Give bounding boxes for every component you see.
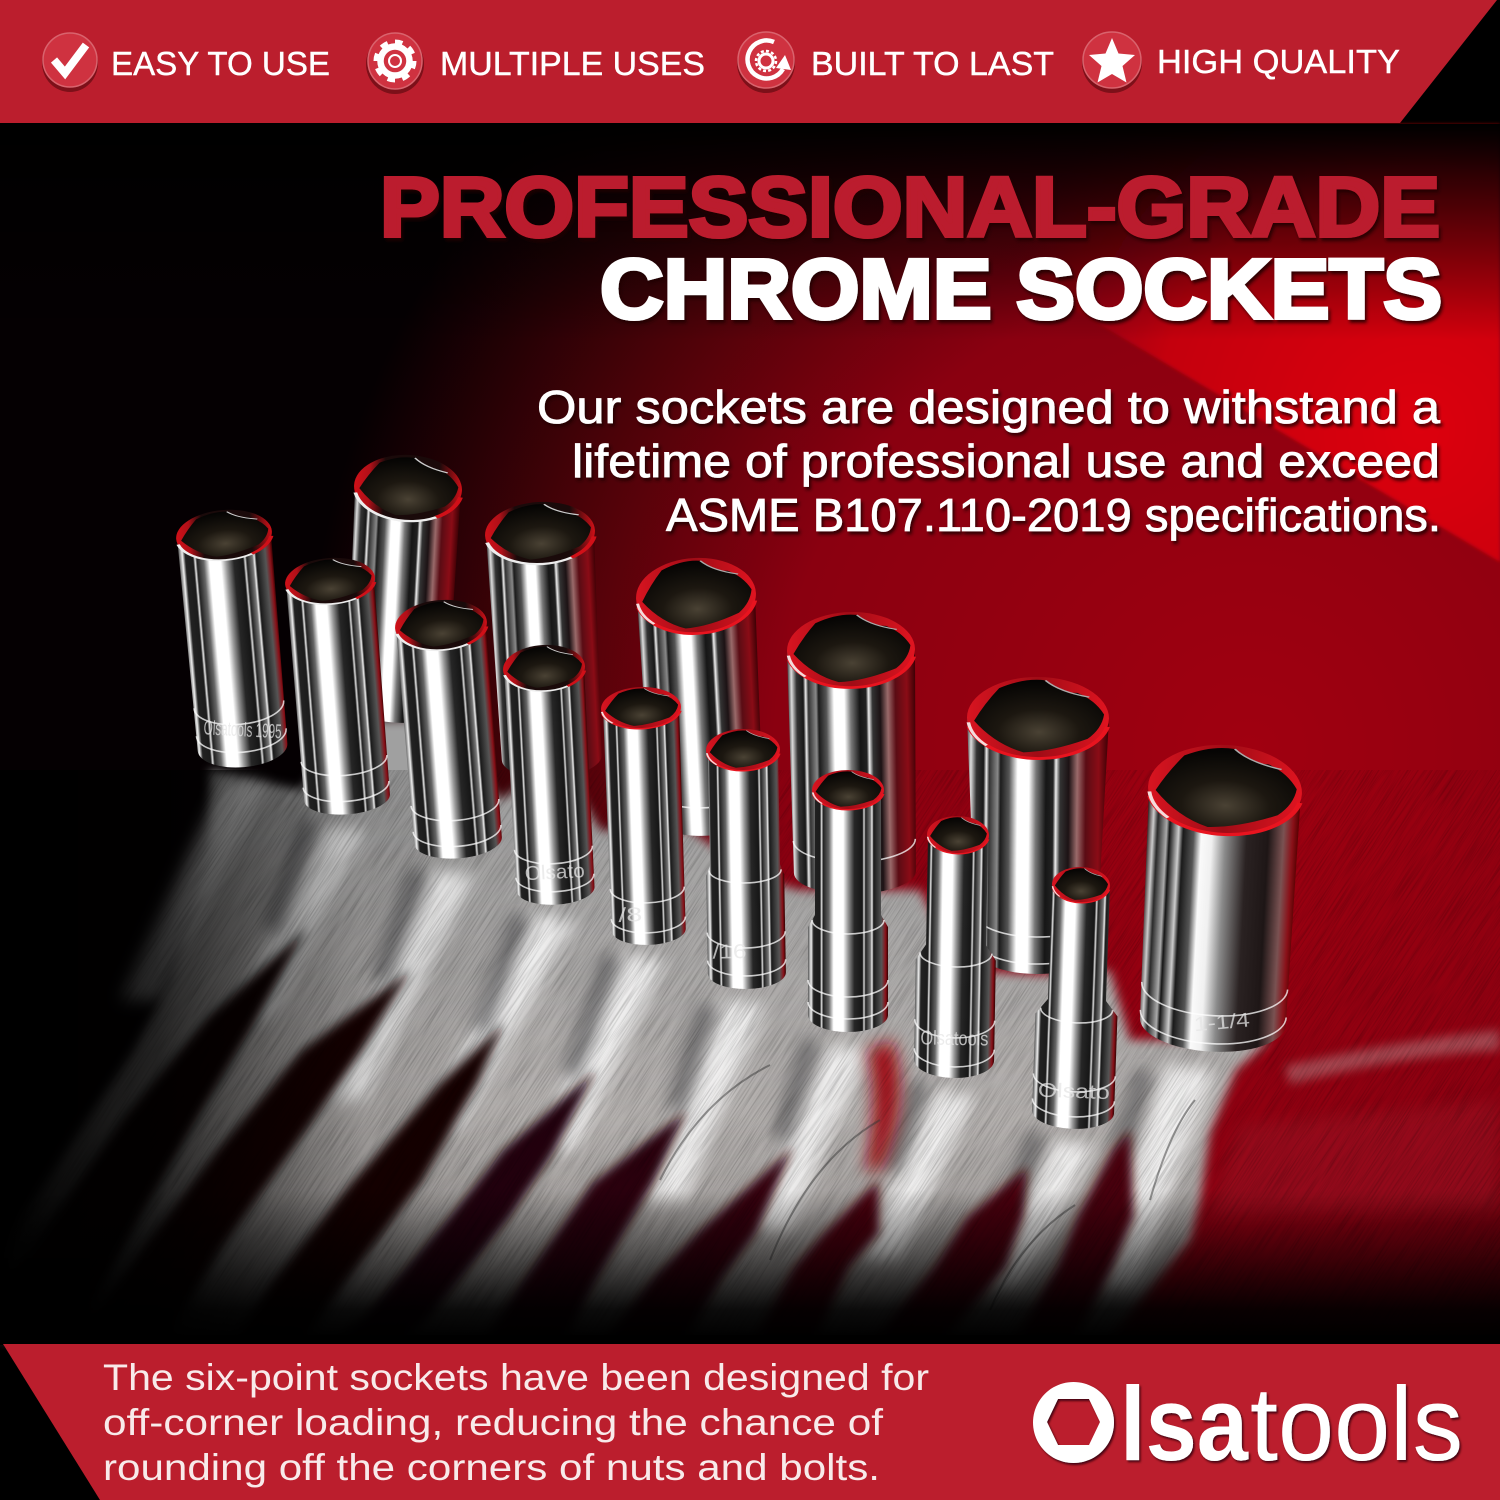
title: PROFESSIONAL-GRADE [380, 160, 1440, 254]
label: multiple uses: MULTIPLE USES [440, 45, 705, 82]
socket: back row third [634, 555, 768, 839]
socket: front row third [393, 596, 505, 862]
bottom text block: rounding off the corners of nuts and bolts. [103, 1447, 880, 1488]
socket: stepped 7/16 [704, 728, 786, 990]
description text block [537, 381, 1441, 541]
socket: stepped 1/2 [808, 770, 888, 1032]
socket: largest 1-1/4 [1134, 741, 1304, 1056]
label: built to last: BUILT TO LAST [811, 45, 1054, 82]
logo: Olsatools: tools [1250, 1366, 1463, 1483]
title [380, 160, 1442, 336]
title: CHROME SOCKETS [600, 242, 1442, 336]
socket: stepped small: Olsatools [920, 1027, 989, 1051]
bottom text block [103, 1357, 929, 1488]
icon: check mark [42, 33, 98, 92]
description text block: Our sockets are designed to withstand a [537, 381, 1440, 433]
description text block: ASME B107.110-2019 specifications. [666, 489, 1441, 541]
icon: star [1082, 32, 1142, 93]
socket: front row fourth: Olsato [524, 860, 585, 885]
socket: front row fifth 3/8 [600, 686, 689, 946]
label: high quality: HIGH QUALITY [1157, 43, 1400, 80]
socket: back row second [483, 499, 608, 781]
top banner [0, 0, 1497, 123]
socket: largest 1-1/4: 1-1/4 [1193, 1009, 1251, 1036]
socket: stepped smallest [1032, 866, 1123, 1130]
icon: gear [366, 33, 424, 94]
socket: back row fourth [786, 611, 919, 895]
floor: brushed steel with light beams and socket shadows [0, 720, 1500, 1345]
socket: front row fifth 3/8: /8 [618, 904, 643, 927]
label: easy to use: EASY TO USE [111, 45, 330, 82]
bottom text block: The six-point sockets have been designed for [103, 1357, 929, 1398]
bottom banner [3, 1344, 1500, 1500]
socket: front row second [283, 555, 393, 818]
socket: back row fifth [965, 676, 1109, 975]
logo: Olsatools: lsa [1120, 1366, 1249, 1483]
socket: stepped small [914, 815, 998, 1079]
socket: front row first [174, 506, 292, 771]
socket: back row tall [342, 452, 464, 726]
socket: stepped smallest: Olsato [1037, 1080, 1110, 1104]
description text block: lifetime of professional use and exceed [572, 435, 1440, 487]
bottom text block: off-corner loading, reducing the chance of [103, 1402, 884, 1443]
socket: front row fourth [502, 643, 597, 907]
socket: stepped 7/16: /16 [712, 941, 747, 964]
logo: Olsatools [1033, 1366, 1463, 1483]
icon: circular arrow with gear [737, 32, 795, 93]
sockets: fifteen chrome six-point sockets [174, 452, 1304, 1130]
socket: front row first: Olsatools 1995 [203, 717, 282, 743]
